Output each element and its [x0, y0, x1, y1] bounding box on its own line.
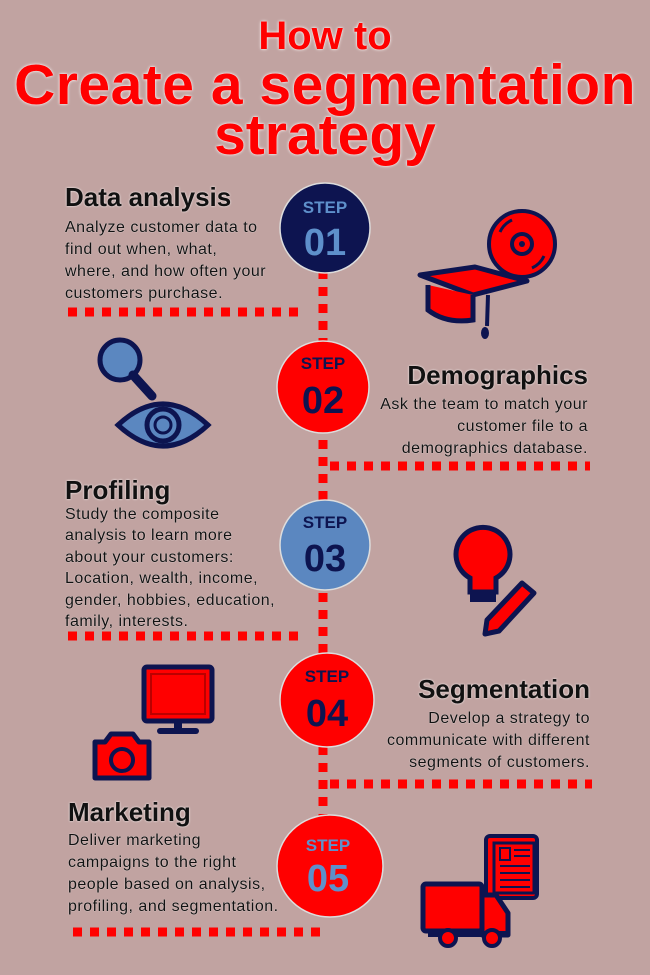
step 3 text: Location, wealth, income,	[65, 570, 258, 587]
icon: light bulb	[456, 527, 510, 602]
step 5 text: Deliver marketing	[68, 832, 201, 849]
step 2 text: Ask the team to match your	[380, 396, 588, 413]
step 05 circle: STEP	[306, 836, 350, 855]
title	[14, 14, 636, 168]
step 5 text: profiling, and segmentation.	[68, 898, 279, 915]
step 1 text: customers purchase.	[65, 285, 223, 302]
step 1 text: Data analysis	[65, 182, 231, 212]
step 5 text: people based on analysis,	[68, 876, 266, 893]
step 05 circle: 05	[307, 858, 349, 900]
step 1 text	[64, 182, 266, 302]
step 04 circle: 04	[306, 693, 348, 735]
step 1 text: where, and how often your	[65, 263, 266, 280]
step 4 text: Segmentation	[418, 674, 590, 704]
step 3 text: Profiling	[65, 475, 170, 505]
step 05 circle	[277, 815, 383, 917]
icon: graduation cap	[420, 267, 527, 339]
step 2 text: demographics database.	[402, 440, 588, 457]
step 4 text: segments of customers.	[409, 754, 590, 771]
step 5 text: campaigns to the right	[68, 854, 236, 871]
step 1 text: Analyze customer data to	[65, 219, 258, 236]
step 4 text: communicate with different	[387, 732, 590, 749]
step 03 circle	[280, 500, 370, 590]
icon: monitor	[144, 667, 212, 734]
title: Create a segmentation	[14, 53, 636, 117]
step 01 circle	[280, 183, 370, 273]
step 2 text	[380, 360, 588, 457]
step 3 text	[64, 475, 275, 630]
icon: disc	[489, 211, 555, 277]
step 4 text: Develop a strategy to	[428, 710, 590, 727]
step 02 circle	[277, 341, 369, 433]
step 2 text: customer file to a	[457, 418, 588, 435]
title: How to	[258, 14, 392, 58]
icon: magnifier	[100, 340, 152, 396]
icon: camera	[95, 734, 149, 778]
step 3 text: analysis to learn more	[65, 527, 233, 544]
step 4 text	[387, 674, 590, 771]
step 5 text	[68, 797, 279, 915]
icon: truck	[423, 884, 508, 946]
icon: pencil	[485, 583, 534, 634]
step 04 circle: STEP	[305, 667, 349, 686]
step 1 text: find out when, what,	[65, 241, 217, 258]
step 2 text: Demographics	[407, 360, 588, 390]
step 02 circle: STEP	[301, 354, 345, 373]
step 3 text: family, interests.	[65, 613, 188, 630]
step 01 circle: STEP	[303, 198, 347, 217]
icon: newspaper	[486, 836, 537, 898]
step 5 text: Marketing	[68, 797, 191, 827]
step 03 circle: 03	[304, 538, 346, 580]
icon: eye	[118, 404, 208, 446]
step 01 circle: 01	[304, 222, 346, 264]
step 04 circle	[280, 653, 374, 747]
step 3 text: about your customers:	[65, 549, 234, 566]
step 03 circle: STEP	[303, 513, 347, 532]
title: strategy	[214, 103, 436, 167]
step 3 text: Study the composite	[65, 506, 219, 523]
step 3 text: gender, hobbies, education,	[65, 592, 275, 609]
step 02 circle: 02	[302, 380, 344, 422]
